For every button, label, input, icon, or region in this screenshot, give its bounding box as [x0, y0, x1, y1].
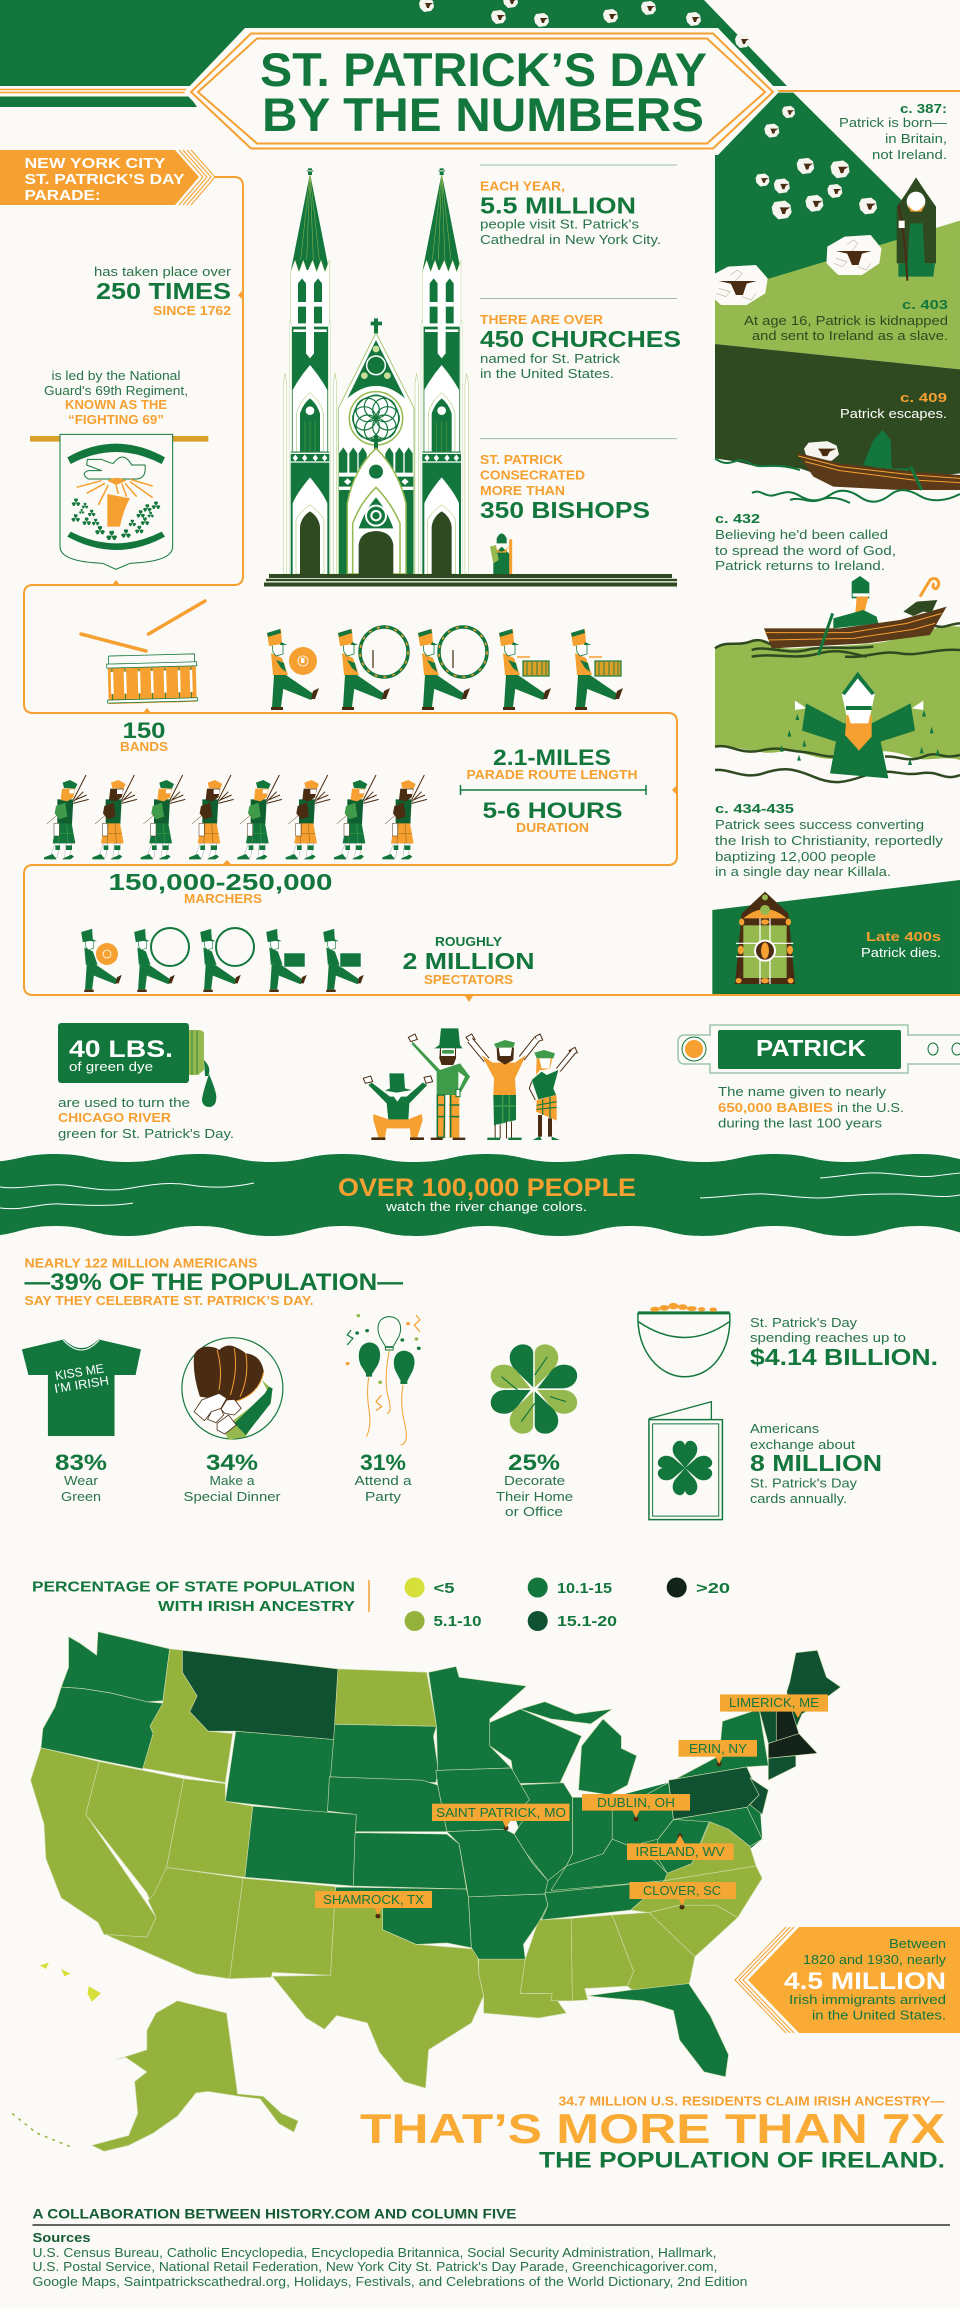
stat: fighting 69: Guard's 69th Regiment, [44, 384, 188, 398]
stat: 450 churches: named for St. Patrick [480, 352, 621, 366]
map heading: PERCENTAGE OF STATE POPULATION [32, 1578, 355, 1596]
icon: St. Patrick's Cathedral [283, 168, 511, 574]
marching band row 1 [267, 627, 623, 710]
banner: New York City parade: NEW YORK CITY [24, 155, 166, 172]
label: Ireland, WV: IRELAND, WV [636, 1844, 725, 1859]
banner: 4.5 million immigrants: Between [889, 1937, 946, 1951]
c. 403 text: c. 403 [902, 298, 948, 312]
stat: 250 times: 250 TIMES [96, 278, 231, 304]
label: Erin, NY [678, 1740, 757, 1766]
c. 434-435 text: baptizing 12,000 people [715, 850, 876, 864]
stat: fighting 69 [44, 369, 188, 427]
stat: 40 lbs of green dye: are used to turn the [58, 1096, 190, 1110]
figure: young Patrick with staff [897, 177, 936, 281]
credits and sources: U.S. Census Bureau, Catholic Encyclopedia, Encyclopedia Britannica, Social Security Administration, Hallmark, [32, 2246, 716, 2260]
icon: Kiss Me t-shirt: KISS ME [54, 1361, 105, 1383]
stat: 8 million cards: Americans [750, 1422, 819, 1436]
icon: party balloons [346, 1314, 421, 1445]
map legend: 10.1-15 [557, 1580, 612, 1597]
stat: 40 lbs of green dye: of green dye [69, 1060, 153, 1074]
stat: special dinner: 34% [206, 1450, 258, 1475]
stat: $4.14 billion: spending reaches up to [750, 1331, 906, 1345]
map legend [405, 1578, 730, 1631]
stat: attend a party: 31% [360, 1450, 406, 1475]
timeline: Patrick's life panels [708, 93, 960, 995]
stat: fighting 69: is led by the National [52, 369, 180, 383]
map legend: >20 [696, 1580, 730, 1597]
stat: route length and duration [460, 745, 646, 835]
stat: 250 times [94, 265, 231, 318]
credits and sources: U.S. Postal Service, National Retail Federation, New York City St. Patrick's Day Parade, Greenchicagoriver.com, [32, 2260, 718, 2274]
stat: 450 churches [480, 298, 681, 381]
c. 403 text: At age 16, Patrick is kidnapped [744, 314, 948, 328]
stat: 8 million cards [750, 1422, 882, 1506]
pipers row [44, 775, 427, 859]
label: Saint Patrick, MO [432, 1804, 570, 1830]
stat: wear green: Green [61, 1490, 101, 1504]
stat: 250 times: SINCE 1762 [153, 304, 231, 318]
stat: 150 bands: 150 [122, 718, 166, 743]
closing statement: THE POPULATION OF IRELAND. [539, 2148, 945, 2172]
icon: escape boat [797, 430, 960, 490]
parade route line [24, 177, 960, 995]
stat: special dinner: Make a [210, 1474, 255, 1488]
closing statement [360, 2094, 945, 2172]
stat: spectators: 2 MILLION [402, 948, 534, 974]
label: Dublin, OH: DUBLIN, OH [597, 1795, 675, 1810]
stat: Patrick name tag: PATRICK [756, 1035, 866, 1061]
icon: name bracelet [678, 1025, 960, 1073]
title hexagon: BY THE NUMBERS [262, 88, 704, 141]
map legend: <5 [434, 1580, 454, 1597]
stat: wear green: 83% [55, 1450, 107, 1475]
c. 387 text [839, 102, 948, 162]
label: Clover, SC: CLOVER, SC [643, 1883, 721, 1898]
c. 409 text: c. 409 [900, 391, 947, 405]
banner: New York City parade: PARADE: [24, 187, 100, 204]
cathedral steps [264, 574, 677, 586]
stat: route length and duration: PARADE ROUTE LENGTH [466, 768, 638, 782]
heading: 39% of the population: SAY THEY CELEBRATE ST. PATRICK’S DAY. [24, 1294, 314, 1308]
icon: Kiss Me t-shirt [22, 1339, 141, 1436]
heading: 39% of the population: —39% OF THE POPULATION— [24, 1269, 404, 1296]
stat: 5.5 million: 5.5 MILLION [480, 192, 636, 218]
stat: fighting 69: “FIGHTING 69” [68, 413, 164, 427]
icon: special dinner plate [182, 1338, 283, 1440]
c. 387 text: Patrick is born— [839, 116, 948, 130]
c. 432 text [715, 512, 896, 573]
stat: marchers [108, 869, 332, 906]
map of the United States [12, 1632, 841, 2151]
panel: green river [0, 1154, 960, 1236]
label: Shamrock, TX: SHAMROCK, TX [323, 1892, 424, 1907]
icon: four-leaf clover [491, 1344, 577, 1434]
stat: 350 bishops: ST. PATRICK [480, 453, 563, 467]
banner: 4.5 million immigrants [735, 1927, 960, 2033]
label: Erin, NY: ERIN, NY [689, 1741, 747, 1756]
stat: decorate: 25% [508, 1450, 560, 1475]
stat: special dinner: Special Dinner [184, 1490, 280, 1504]
c. 432 text: Believing he'd been called [715, 528, 888, 542]
stat: 450 churches: in the United States. [480, 367, 614, 381]
panel: green river: watch the river change colors. [385, 1200, 587, 1214]
stat: wear green [55, 1450, 107, 1504]
stat: decorate: Their Home [496, 1490, 573, 1504]
c. 409 text: Patrick escapes. [840, 407, 947, 421]
label: Dublin, OH [582, 1794, 690, 1822]
credits and sources: A COLLABORATION BETWEEN HISTORY.COM AND COLUMN FIVE [32, 2206, 516, 2222]
banner: 4.5 million immigrants: Irish immigrants arrived [789, 1993, 946, 2007]
map legend: 5.1-10 [434, 1613, 482, 1630]
label: Shamrock, TX [315, 1891, 432, 1918]
panel: green river: OVER 100,000 PEOPLE [338, 1174, 636, 1202]
label: Limerick, ME [720, 1694, 828, 1718]
stat: 8 million cards: cards annually. [750, 1492, 847, 1506]
c. 387 text: c. 387: [900, 102, 947, 116]
stat: 450 churches: THERE ARE OVER [480, 313, 603, 327]
stat: wear green: Wear [64, 1474, 98, 1488]
stat: marchers: MARCHERS [184, 892, 262, 906]
c. 432 text: Patrick returns to Ireland. [715, 559, 885, 573]
stat: attend a party: Party [365, 1490, 402, 1504]
banner: 4.5 million immigrants: 1820 and 1930, nearly [803, 1953, 947, 1967]
c. 434-435 text [715, 802, 944, 879]
stat: 8 million cards: exchange about [750, 1438, 856, 1452]
label: Ireland, WV [627, 1834, 734, 1860]
icon: 69th regiment shield [30, 434, 208, 569]
banner: 4.5 million immigrants: 4.5 MILLION [784, 1968, 946, 1995]
map heading: WITH IRISH ANCESTRY [158, 1598, 355, 1615]
stat: $4.14 billion [750, 1316, 938, 1370]
stat: marchers: 150,000-250,000 [108, 869, 332, 895]
label: Saint Patrick, MO: SAINT PATRICK, MO [436, 1805, 566, 1820]
stat: route length and duration: DURATION [516, 821, 589, 835]
stat: spectators: SPECTATORS [424, 973, 513, 987]
stat: $4.14 billion: St. Patrick's Day [750, 1316, 858, 1330]
stats: celebration percentages [55, 1450, 573, 1519]
credits and sources [32, 2206, 950, 2289]
closing statement: THAT’S MORE THAN 7X [360, 2105, 945, 2152]
stat: decorate: Decorate [504, 1474, 565, 1488]
stat: fighting 69: KNOWN AS THE [65, 398, 167, 412]
c. 387 text: in Britain, [885, 132, 947, 146]
icon: snare drum [81, 601, 205, 704]
Late 400s text [861, 930, 941, 960]
label: Limerick, ME: LIMERICK, ME [729, 1695, 819, 1710]
stat: 40 lbs of green dye: 40 LBS. [69, 1036, 173, 1063]
stat: 350 bishops: 350 BISHOPS [480, 497, 650, 523]
heading: 39% of the population: NEARLY 122 MILLION AMERICANS [24, 1256, 258, 1270]
scene: green pasture with sheep [708, 93, 960, 480]
stat: 8 million cards: St. Patrick's Day [750, 1476, 858, 1490]
c. 387 text: not Ireland. [872, 148, 947, 162]
c. 434-435 text: in a single day near Killala. [715, 865, 891, 879]
map heading [32, 1578, 369, 1615]
stat: Patrick name tag [678, 1025, 960, 1130]
banner: New York City parade: ST. PATRICK’S DAY [24, 171, 184, 188]
Late 400s text: Late 400s [866, 930, 941, 944]
stat: 350 bishops: MORE THAN [480, 484, 565, 498]
credits and sources: Sources [32, 2230, 90, 2245]
stat: Patrick name tag: 650,000 BABIES [718, 1101, 833, 1115]
c. 409 text [840, 391, 947, 421]
stat: 40 lbs of green dye [58, 1023, 234, 1141]
stat: decorate [496, 1450, 573, 1519]
stat: 5.5 million [480, 165, 677, 247]
stat: spectators: ROUGHLY [435, 935, 503, 949]
c. 434-435 text: c. 434-435 [715, 802, 794, 816]
stat: Patrick name tag: The name given to nearly [718, 1085, 887, 1099]
stat: $4.14 billion: $4.14 BILLION. [750, 1344, 938, 1370]
stat: route length and duration: 2.1-MILES [493, 745, 611, 770]
marching band row 2 [81, 928, 364, 992]
banner: New York City parade [0, 150, 215, 205]
stat: 8 million cards: 8 MILLION [750, 1450, 882, 1476]
icon: celebrating crowd [363, 1028, 577, 1140]
stat: 5.5 million: people visit St. Patrick's [480, 218, 639, 232]
stat: Patrick name tag: in the U.S. [837, 1101, 904, 1115]
stat: 40 lbs of green dye: green for St. Patrick's Day. [58, 1127, 234, 1141]
stat: attend a party [354, 1450, 412, 1504]
scene: Patrick's tomb [712, 880, 960, 995]
credits and sources: Google Maps, Saintpatrickscathedral.org, Holidays, Festivals, and Celebrations of the World Dictionary, 2nd Edition [32, 2275, 748, 2289]
banner: 4.5 million immigrants: in the United States. [812, 2008, 946, 2022]
stat: Patrick name tag: during the last 100 years [718, 1116, 882, 1130]
route markers [112, 290, 677, 1002]
Late 400s text: Patrick dies. [861, 946, 941, 960]
c. 434-435 text: the Irish to Christianity, reportedly [715, 834, 944, 848]
icon: dye box [58, 1023, 216, 1107]
stat: special dinner [184, 1450, 280, 1504]
stat: 250 times: has taken place over [94, 265, 231, 279]
stat: 5.5 million: EACH YEAR, [480, 180, 565, 194]
stat: 40 lbs of green dye: CHICAGO RIVER [58, 1111, 171, 1125]
heading: 39% of the population [24, 1256, 404, 1308]
map place labels [315, 1694, 828, 1918]
icon: Kiss Me t-shirt: I'M IRISH [53, 1374, 110, 1396]
c. 403 text [744, 298, 948, 343]
stat: 450 churches: 450 CHURCHES [480, 326, 681, 352]
c. 403 text: and sent to Ireland as a slave. [752, 329, 948, 343]
map legend: 15.1-20 [557, 1613, 617, 1630]
title hexagon [184, 28, 779, 155]
stat: attend a party: Attend a [354, 1474, 412, 1488]
c. 432 text: to spread the word of God, [715, 544, 896, 558]
stat: route length and duration: 5-6 HOURS [482, 798, 622, 823]
stat: 150 bands: BANDS [120, 740, 168, 754]
icon: greeting card [649, 1402, 722, 1520]
stat: 350 bishops [480, 439, 677, 523]
closing statement: 34.7 MILLION U.S. RESIDENTS CLAIM IRISH ANCESTRY— [558, 2094, 944, 2109]
icon: pot of gold [638, 1303, 730, 1377]
c. 432 text: c. 432 [715, 512, 760, 526]
stat: spectators [402, 935, 534, 987]
stat: 150 bands [120, 718, 168, 754]
stat: 5.5 million: Cathedral in New York City. [480, 233, 661, 247]
waves under escape boat [752, 490, 960, 503]
stat: 350 bishops: CONSECRATED [480, 468, 585, 482]
scene: return to Ireland and baptism [715, 623, 960, 782]
c. 434-435 text: Patrick sees success converting [715, 818, 924, 832]
stat: decorate: or Office [505, 1505, 563, 1519]
icon: return boat with bishop [764, 576, 947, 655]
label: Clover, SC [630, 1882, 736, 1910]
header band [0, 0, 960, 107]
title hexagon: ST. PATRICK’S DAY [260, 43, 707, 96]
